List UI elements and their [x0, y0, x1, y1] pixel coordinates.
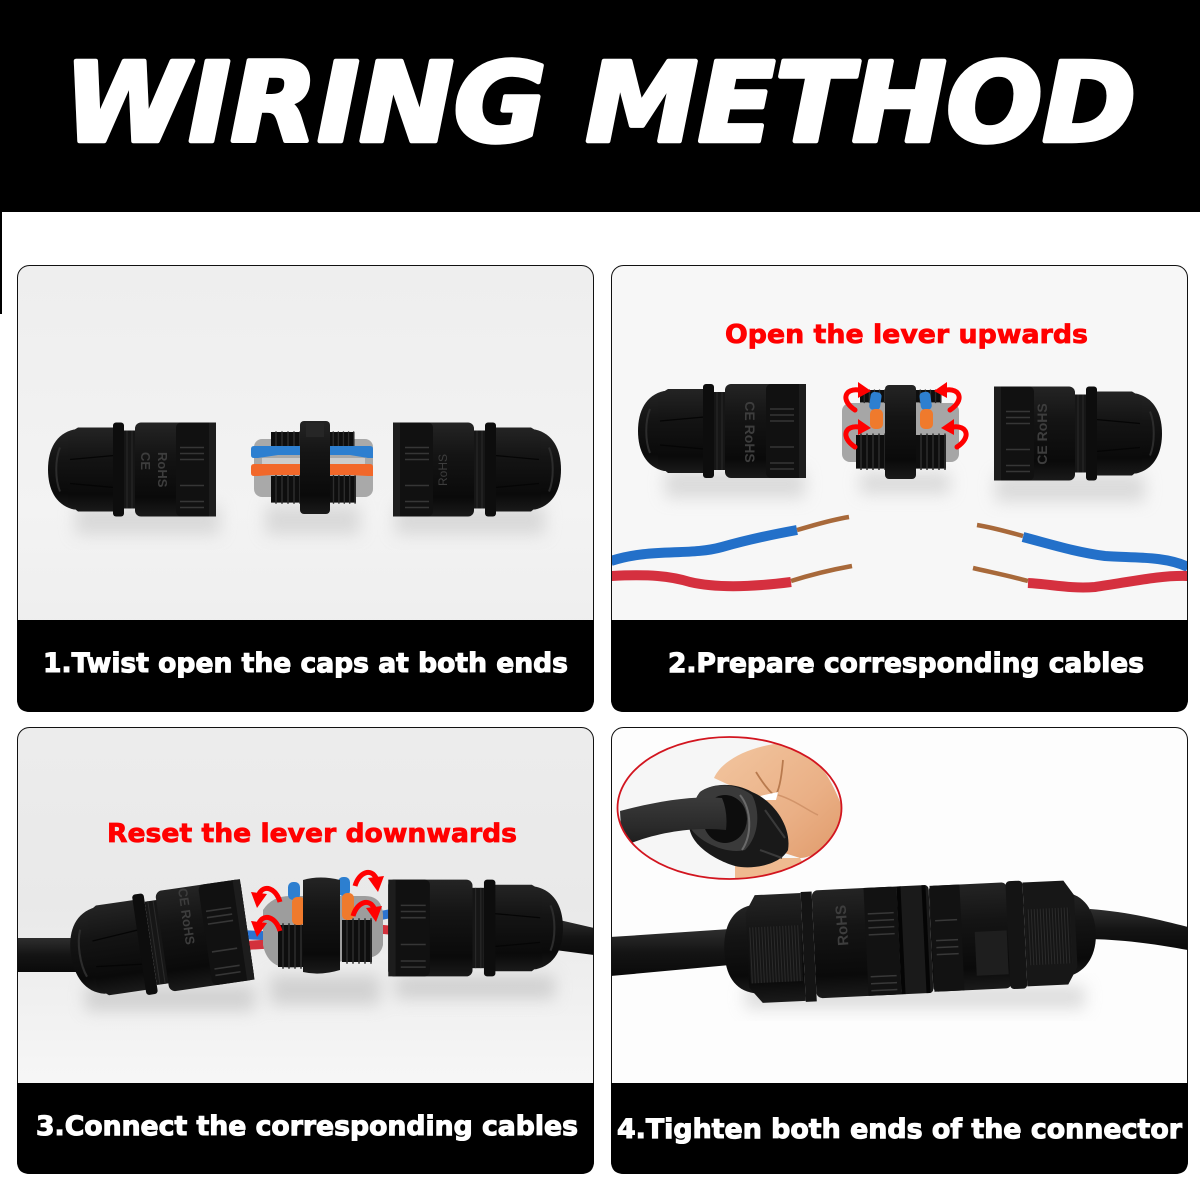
photo: connector and cables: [611, 320, 1188, 587]
product marking: RoHS: [833, 904, 852, 946]
red note: Reset the lever downwards: [107, 819, 517, 849]
photo: assembled connector: [611, 737, 1188, 1009]
title banner: [0, 0, 1200, 314]
caption: 1.Twist open the caps at both ends: [43, 648, 568, 679]
panel: step 3: [17, 728, 594, 1174]
title: WIRING METHOD: [64, 39, 1136, 167]
red arrows: reset downward: [251, 872, 384, 937]
connector left cap: [638, 384, 806, 478]
caption bar: [611, 1083, 1188, 1174]
center block with raised levers: [842, 385, 959, 479]
inset: hand tightening cap: [618, 737, 845, 885]
connector right cap: [393, 422, 561, 516]
left wires: [611, 517, 852, 586]
caption: 3.Connect the corresponding cables: [36, 1111, 578, 1142]
photo: connector and cables: CE RoHS: [1034, 403, 1050, 465]
photo: cables fed into connector: [17, 819, 594, 1011]
hand: [714, 742, 845, 858]
panel: step 4: [611, 728, 1188, 1174]
panel: step 1: [17, 266, 594, 712]
inner colored wires: [248, 910, 388, 950]
product markings: CE RoHS: [742, 401, 758, 463]
red arrows: open upward: [846, 382, 966, 447]
cable: [620, 797, 726, 847]
photo: opened connector parts: RoHS: [436, 454, 450, 486]
photo: opened connector parts: CE: [138, 452, 153, 470]
caption bar: [611, 620, 1188, 712]
photo: opened connector parts: [48, 421, 561, 535]
gland nut: [689, 785, 789, 867]
connector left cap: [70, 879, 254, 996]
right wires: [973, 525, 1188, 587]
product markings: CE RoHS: [175, 887, 198, 946]
center block: [251, 421, 373, 514]
connector right cap: [388, 880, 563, 976]
black cables: [17, 938, 80, 972]
panel: step 2: [611, 266, 1188, 712]
product markings: RoHS: [155, 452, 170, 488]
caption bar: [17, 620, 594, 712]
connector left cap: [48, 422, 216, 516]
center block: [263, 877, 383, 974]
caption: 2.Prepare corresponding cables: [668, 648, 1144, 679]
caption: 4.Tighten both ends of the connector: [617, 1114, 1183, 1145]
black cables: [611, 929, 730, 976]
connector right cap: [994, 386, 1162, 480]
assembled connector body: [722, 877, 1098, 1006]
red note: Open the lever upwards: [725, 320, 1088, 350]
caption bar: [17, 1083, 594, 1174]
